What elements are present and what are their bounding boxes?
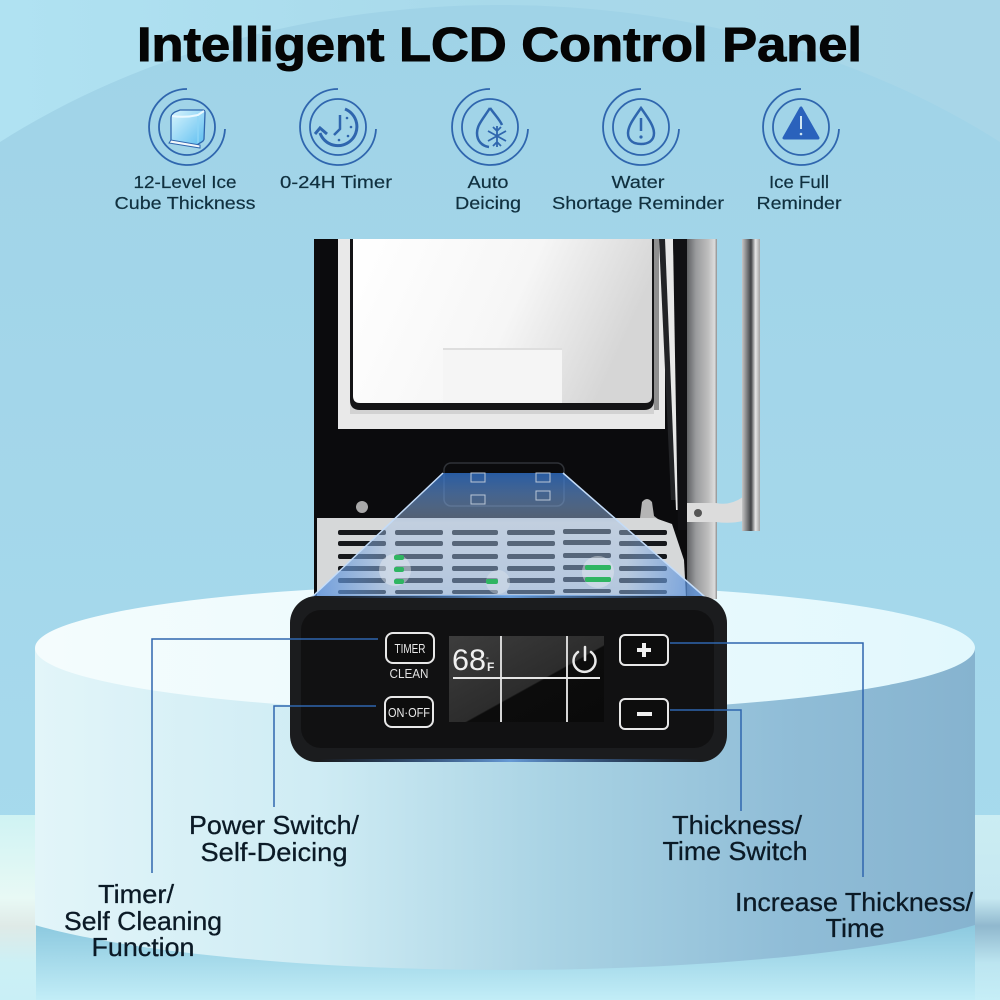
label: Deicing <box>455 193 521 213</box>
fan clips and green accents <box>379 554 614 594</box>
callout: power: Self-Deicing <box>200 837 348 867</box>
leader line: increase <box>670 643 863 877</box>
CLEAN label: CLEAN <box>390 667 428 681</box>
screws <box>356 499 662 522</box>
minus button <box>620 699 668 729</box>
leader line: power <box>274 706 376 807</box>
icon: clock <box>300 89 376 165</box>
floor <box>0 815 1000 1000</box>
plus button <box>620 635 668 665</box>
feature: ice full <box>756 89 842 213</box>
LCD display: F <box>487 660 494 674</box>
feature: ice thickness <box>114 89 256 213</box>
faint panel outline on machine <box>444 463 564 506</box>
leader line: thickness <box>670 710 741 811</box>
callout: timer: Self Cleaning <box>64 906 222 936</box>
feature: water shortage <box>552 89 724 213</box>
callout: thickness: Thickness/ <box>672 810 803 840</box>
vent plate <box>317 518 686 597</box>
label: 12-Level Ice <box>134 172 236 192</box>
label: Cube Thickness <box>114 193 256 213</box>
leader line: timer <box>152 639 378 873</box>
feature: auto deicing <box>452 89 528 213</box>
feature: timer <box>280 89 392 192</box>
callout: thickness: Time Switch <box>662 836 808 866</box>
white ice door <box>353 239 652 403</box>
LCD display: 68 <box>452 644 486 677</box>
machine cabinet <box>314 239 688 597</box>
door handle <box>687 239 760 531</box>
podium <box>35 584 975 970</box>
callout: increase: Increase Thickness/ <box>735 887 974 917</box>
label: Ice Full <box>769 172 829 192</box>
LCD display <box>449 636 604 722</box>
TIMER button <box>386 633 434 663</box>
icon: warning triangle <box>763 89 839 165</box>
icon: droplet with exclamation <box>603 89 679 165</box>
callout: power: Power Switch/ <box>189 810 360 840</box>
TIMER button: TIMER <box>394 641 426 656</box>
callout: timer: Function <box>92 932 194 962</box>
label: 0-24H Timer <box>280 172 392 192</box>
callout: increase: Time <box>826 913 884 943</box>
power icon <box>574 647 596 672</box>
ON-OFF button <box>385 697 433 727</box>
steel door post <box>687 239 717 599</box>
projection beam <box>312 473 705 597</box>
callout: timer: Timer/ <box>98 879 175 909</box>
ice maker product <box>312 239 760 599</box>
label: Shortage Reminder <box>552 193 724 213</box>
label: Auto <box>468 172 508 192</box>
label: Water <box>612 172 665 192</box>
icon: ice cube <box>149 89 225 165</box>
LCD display: ° <box>486 656 489 664</box>
right door edge <box>654 239 688 530</box>
small projected buttons <box>471 473 550 504</box>
ON-OFF button: ON·OFF <box>388 705 430 720</box>
control panel <box>290 595 727 762</box>
title: Intelligent LCD Control Panel <box>137 19 862 72</box>
label: Reminder <box>756 193 842 213</box>
icon: droplet and snowflake <box>452 89 528 165</box>
